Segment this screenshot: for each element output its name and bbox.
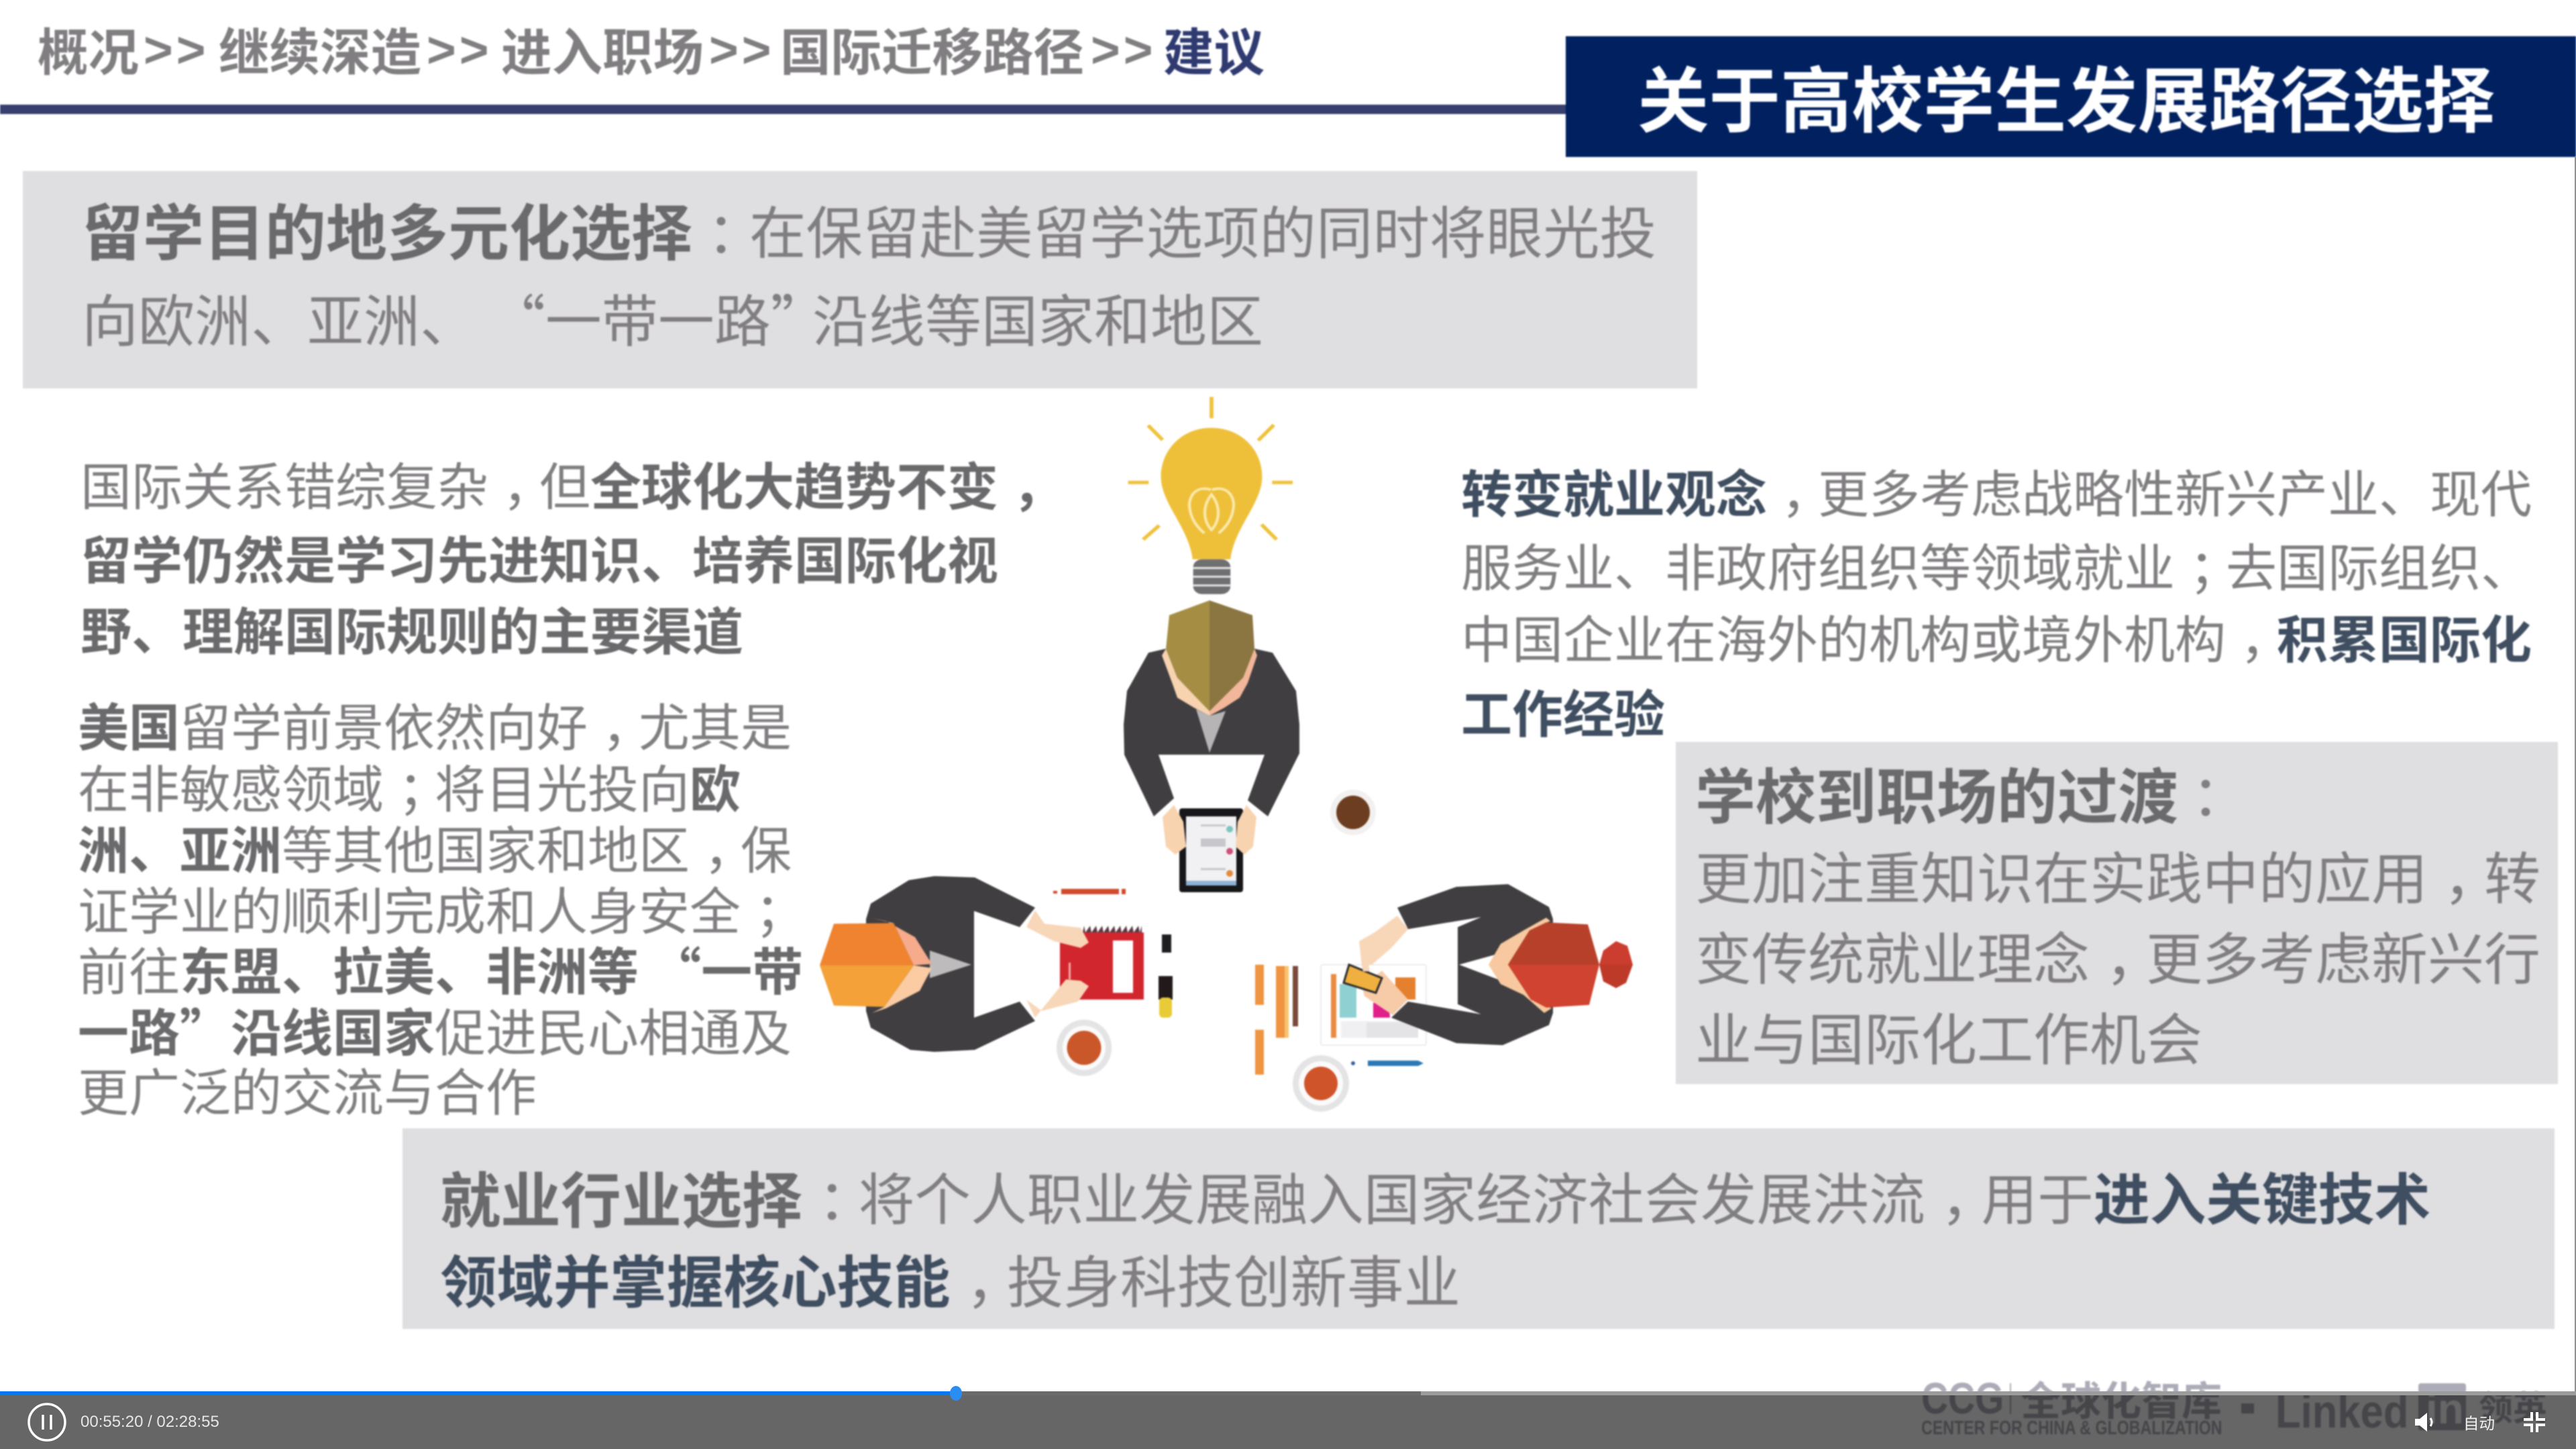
text: destinations detail bbox=[78, 687, 806, 1126]
text: destinations detail: 更广泛的交流与合作 bbox=[78, 1052, 537, 1126]
icon: speaker bbox=[2415, 1413, 2432, 1432]
panel: school to workplace transition: 更加注重知识在实践中的应用 ，转 bbox=[1695, 835, 2540, 916]
watermark: CCG and LinkedIn logos: Linked bbox=[2275, 1385, 2409, 1438]
figure: left person with orange hair bbox=[820, 876, 1035, 1052]
text: globalization trend: 留学仍然是学习先进知识、培养国际化视 bbox=[80, 520, 998, 594]
text: destinations detail: 在非敏感领域 ；将目光投向欧 bbox=[78, 749, 741, 822]
text: destinations detail: 前往东盟、拉美、非洲等 “一带 bbox=[78, 931, 803, 1005]
watermark: CCG and LinkedIn logos: 领英 bbox=[2479, 1381, 2547, 1430]
bar background bbox=[0, 1395, 2576, 1449]
panel: study destination diversification bbox=[23, 171, 1697, 388]
watermark: CCG and LinkedIn logos bbox=[1921, 1369, 2547, 1439]
video control bar bbox=[0, 1386, 2576, 1449]
icon: coffee cup left bbox=[1057, 1020, 1112, 1076]
watermark: CCG and LinkedIn logos: CCG bbox=[1921, 1373, 2004, 1423]
panel: school to workplace transition: 学校到职场的过渡 bbox=[1695, 749, 2178, 836]
panel: employment industry choice bbox=[402, 1128, 2555, 1329]
watermark: CCG and LinkedIn logos: CENTER FOR CHINA & GLOBALIZATION bbox=[1921, 1417, 2222, 1439]
icon: red pencil bbox=[1053, 889, 1126, 894]
header rule bbox=[0, 105, 1566, 114]
panel: school to workplace transition: ： bbox=[2192, 751, 2248, 833]
icon: fullscreen bbox=[2524, 1412, 2545, 1432]
text: destinations detail: 洲、亚洲等其他国家和地区 ，保 bbox=[78, 810, 792, 883]
panel: study destination diversification: 在保留赴美留学选项的同时将眼光投 bbox=[749, 189, 1656, 270]
playback speed label: 自动 bbox=[2463, 1411, 2495, 1434]
icon: coffee cup top right bbox=[1330, 790, 1376, 835]
panel: study destination diversification: 留学目的地多元化选择 bbox=[82, 184, 692, 273]
text: globalization trend bbox=[80, 446, 1063, 665]
text: globalization trend: 野、理解国际规则的主要渠道 bbox=[80, 591, 743, 665]
icon: red notebook bbox=[1026, 910, 1144, 1018]
icon: blue pen bbox=[1351, 1061, 1424, 1066]
playback time: 00:55:20 / 02:28:55 bbox=[80, 1413, 219, 1431]
breadcrumb navigation: 建议 bbox=[1163, 11, 1265, 85]
text: employment mindset: 服务业、非政府组织等领域就业 ；去国际组织、 bbox=[1461, 527, 2532, 601]
breadcrumb navigation: >> bbox=[144, 21, 209, 78]
figure: right person with red hair bbox=[1344, 884, 1633, 1045]
icon: document with chart bbox=[1321, 965, 1426, 1045]
illustration: three people around a table with a light bulb bbox=[818, 396, 1634, 1112]
icon: clip and marker bbox=[1159, 934, 1173, 1018]
watermark: CCG and LinkedIn logos: 全球化智库 bbox=[2021, 1369, 2222, 1428]
icon: coffee cup right bbox=[1293, 1055, 1349, 1112]
text: employment mindset: 中国企业在海外的机构或境外机构 ，积累国际化 bbox=[1461, 599, 2532, 673]
text: employment mindset bbox=[1461, 453, 2532, 747]
figure: top person with tablet bbox=[1124, 600, 1299, 892]
breadcrumb navigation: >> bbox=[1091, 21, 1157, 78]
panel: employment industry choice: ：将个人职业发展融入国家经济社会发展洪流 ，用于进入关键技术 bbox=[818, 1155, 2430, 1236]
progress track bbox=[0, 1391, 2576, 1395]
panel: school to workplace transition: 业与国际化工作机会 bbox=[1695, 996, 2202, 1077]
breadcrumb navigation: >> bbox=[709, 21, 775, 78]
breadcrumb navigation: 继续深造 bbox=[219, 11, 421, 85]
panel: employment industry choice: 就业行业选择 bbox=[440, 1152, 802, 1240]
watermark: CCG and LinkedIn logos: in bbox=[2426, 1385, 2464, 1433]
breadcrumb navigation: 国际迁移路径 bbox=[780, 11, 1084, 85]
right edge line bbox=[2575, 157, 2576, 1391]
icon: pause button bbox=[28, 1403, 66, 1442]
text: globalization trend: 国际关系错综复杂 ，但全球化大趋势不变 ， bbox=[80, 446, 1063, 520]
panel: school to workplace transition: 变传统就业理念 ，更多考虑新兴行 bbox=[1695, 915, 2540, 996]
panel: employment industry choice: 领域并掌握核心技能 ，投身科技创新事业 bbox=[440, 1238, 1460, 1320]
icon: orange rulers and pens bbox=[1255, 965, 1298, 1075]
title banner: 关于高校学生发展路径选择 bbox=[1638, 43, 2495, 147]
breadcrumb navigation: 进入职场 bbox=[501, 11, 704, 85]
text: destinations detail: 证学业的顺利完成和人身安全 ； bbox=[78, 871, 806, 945]
progress thumb bbox=[950, 1386, 962, 1401]
text: employment mindset: 工作经验 bbox=[1461, 674, 1665, 747]
breadcrumb navigation: >> bbox=[427, 21, 492, 78]
text: employment mindset: 转变就业观念 ，更多考虑战略性新兴产业、现代 bbox=[1461, 453, 2532, 527]
panel: school to workplace transition bbox=[1676, 742, 2558, 1084]
panel: study destination diversification: ： bbox=[707, 189, 763, 270]
text: destinations detail: 美国留学前景依然向好 ，尤其是 bbox=[78, 687, 792, 761]
breadcrumb navigation bbox=[38, 11, 1265, 85]
buffered segment bbox=[956, 1391, 1421, 1395]
breadcrumb navigation: 概况 bbox=[38, 11, 139, 85]
text: destinations detail: 一路”沿线国家促进民心相通及 bbox=[78, 992, 792, 1066]
played segment bbox=[0, 1391, 956, 1395]
icon: light bulb bbox=[1128, 397, 1293, 594]
panel: study destination diversification: 向欧洲、亚洲、 “一带一路”沿线等国家和地区 bbox=[82, 277, 1263, 358]
